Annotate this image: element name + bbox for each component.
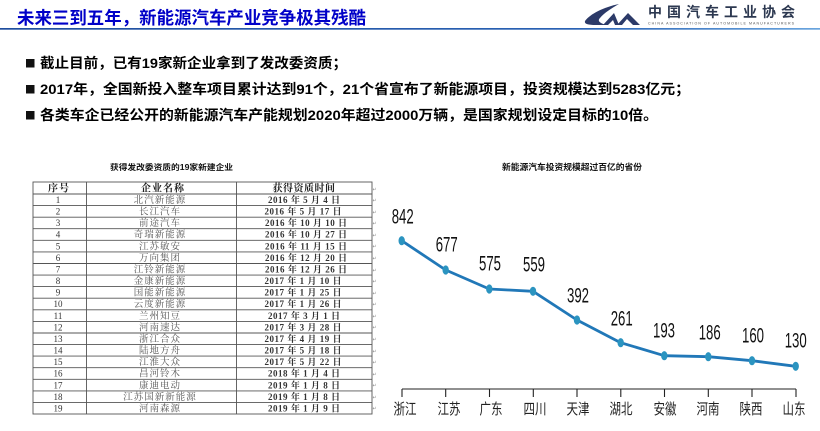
table rows: 16 [54,369,63,379]
table rows: 2017 年 1 月 10 日 [264,275,342,286]
line chart: investment by province [392,206,807,418]
row end marks: ↵ [372,302,377,308]
table rows: 2016 年 10 月 27 日 [265,229,347,240]
table rows: 13 [54,334,63,344]
row end marks [372,187,377,412]
province labels: 湖北 [610,401,632,418]
province labels [394,401,806,418]
row end marks: ↵ [372,233,377,239]
table rows: 2019 年 1 月 8 日 [268,379,340,390]
table rows: 江苏敏安 [139,240,181,252]
row end marks: ↵ [372,187,377,193]
bullet 1: 截止目前，已有19家新企业拿到了发改委资质； [40,55,347,72]
row end marks: ↵ [372,244,377,250]
row end marks: ↵ [372,349,377,355]
table rows: 2017 年 1 月 25 日 [264,287,342,298]
table header: 获得资质时间 [272,182,336,194]
row end marks: ↵ [372,337,377,343]
table: 19 new enterprises [33,182,377,414]
province labels: 浙江 [394,401,416,418]
table rows: 2019 年 1 月 9 日 [268,402,340,413]
bullet 3: 各类车企已经公开的新能源汽车产能规划2020年超过2000万辆，是国家规划设定目标的10倍。 [40,107,658,123]
table rows: 2016 年 12 月 26 日 [265,264,347,274]
table heading: 获得发改委资质的19家新建企业 [110,162,233,172]
row end marks: ↵ [372,279,377,285]
table rows: 昌河铃木 [139,368,181,380]
table rows: 2018 年 1 月 4 日 [268,368,340,379]
table rows: 河南森源 [139,402,181,414]
bullet 2: 2017年，全国新投入整车项目累计达到91个，21个省宣布了新能源项目，投资规模达到5283亿元； [40,81,690,98]
table rows: 前途汽车 [139,217,181,229]
province labels: 江苏 [438,401,460,418]
table rows: 云度新能源 [134,298,186,310]
table rows: 11 [54,311,62,321]
table rows: 江苏国新新能源 [123,391,197,403]
table rows: 兰州知豆 [139,310,181,322]
table rows: 长江汽车 [139,206,181,218]
table rows: 2017 年 1 月 26 日 [264,298,342,309]
table rows: 2017 年 4 月 19 日 [264,333,342,344]
province labels: 陕西 [740,401,762,418]
table header [48,182,336,194]
title: 未来三到五年，新能源汽车产业竞争极其残酷 [17,8,366,28]
province labels: 河南 [696,401,720,418]
table rows: 8 [56,276,61,286]
table rows: 2019 年 1 月 8 日 [268,391,340,402]
logo english name: CHINA ASSOCIATION OF AUTOMOBILE MANUFACTURERS [648,22,795,26]
data values: 559 [523,254,545,276]
table rows: 19 [54,403,63,413]
table rows: 1 [56,195,60,205]
table header: 企业名称 [141,182,185,194]
row end marks: ↵ [372,383,377,389]
table rows: 2016 年 10 月 10 日 [265,217,347,228]
table rows: 北汽新能源 [134,194,186,206]
data values: 160 [742,324,764,348]
table rows: 金康新能源 [134,275,186,287]
table rows: 河南速达 [139,321,181,333]
province labels: 天津 [566,401,590,418]
row end marks: ↵ [372,291,377,297]
logo name: 中国汽车工业协会 [648,4,795,20]
table rows: 2017 年 5 月 22 日 [264,356,342,367]
row end marks: ↵ [372,360,377,366]
chart heading: 新能源汽车投资规模超过百亿的省份 [502,161,642,172]
row end marks: ↵ [372,221,377,227]
table rows: 2017 年 3 月 1 日 [268,310,340,321]
data values: 193 [653,320,675,342]
row end marks: ↵ [372,325,377,331]
table rows: 5 [56,241,61,251]
table rows: 6 [56,253,61,263]
table rows: 2016 年 5 月 17 日 [264,206,342,217]
row end marks: ↵ [372,256,377,262]
table header: 序号 [48,182,70,194]
table rows: 4 [56,230,61,240]
row end marks: ↵ [372,198,377,204]
table rows: 3 [56,218,61,228]
table rows: 9 [56,288,61,298]
row end marks: ↵ [372,268,377,274]
data values: 575 [479,252,501,276]
province labels: 安徽 [654,401,676,418]
table rows: 2017 年 3 月 28 日 [264,321,342,332]
province labels: 山东 [782,401,806,418]
table rows: 2016 年 12 月 20 日 [265,252,347,263]
data values: 842 [392,206,414,228]
table rows: 18 [54,392,63,402]
table rows: 江淮大众 [139,356,181,368]
province labels: 四川 [524,401,546,418]
table rows: 2016 年 5 月 4 日 [268,194,340,205]
data values: 130 [785,330,807,352]
row end marks: ↵ [372,210,377,216]
province labels: 广东 [480,401,502,418]
row end marks: ↵ [372,314,377,320]
row end marks: ↵ [372,395,377,401]
table rows: 2017 年 5 月 18 日 [264,345,342,356]
bullet list [26,55,690,123]
data values: 392 [567,284,589,308]
table rows: 万向集团 [139,252,181,264]
table rows: 15 [54,357,63,367]
data values: 677 [436,234,458,256]
data values [392,206,807,352]
icon: CAM swoosh [585,4,640,25]
row end marks: ↵ [372,372,377,378]
table rows: 康迪电动 [139,379,181,391]
table rows: 17 [54,380,63,390]
table rows: 国能新能源 [134,287,186,299]
data line [402,241,796,366]
x axis [402,389,796,397]
table rows [54,194,347,414]
data values: 261 [611,308,633,330]
table rows: 陆地方舟 [139,345,181,357]
logo: China Association of Automobile Manufacturers [585,4,795,26]
table rows: 14 [54,346,63,356]
table rows: 奇瑞新能源 [134,229,186,241]
data values: 186 [699,322,721,344]
table rows: 10 [54,299,63,309]
table rows: 江铃新能源 [134,264,186,276]
table rows: 7 [56,264,61,274]
header rule [0,28,820,30]
data markers [398,236,799,371]
table rows: 12 [54,322,62,332]
row end marks: ↵ [372,406,377,412]
table rows: 2 [56,207,60,217]
table rows: 2016 年 11 月 15 日 [265,240,347,251]
table rows: 浙江合众 [139,333,181,345]
